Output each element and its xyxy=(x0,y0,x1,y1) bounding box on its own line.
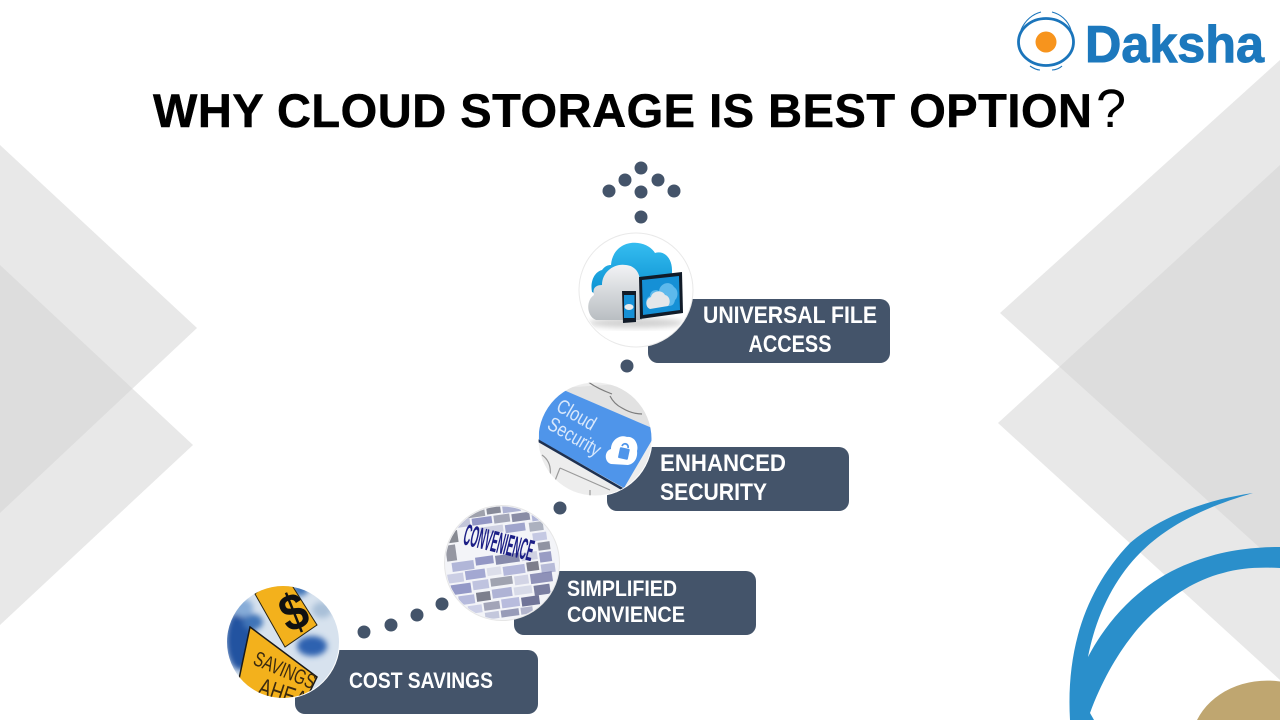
bar text: COST SAVINGS xyxy=(349,668,493,693)
bar text: UNIVERSAL FILE xyxy=(703,302,877,329)
bar text: SIMPLIFIED xyxy=(567,576,677,601)
panel: universal file access xyxy=(579,233,890,363)
icon: cloud security key xyxy=(538,382,652,496)
icon: cloud security key: Cloud xyxy=(552,395,600,435)
bar text: SECURITY xyxy=(660,479,767,506)
panel: simplified convenience xyxy=(438,497,756,635)
label bar xyxy=(514,571,756,635)
title: WHY CLOUD STORAGE IS BEST OPTION xyxy=(153,84,1092,137)
icon: savings ahead sign: $ xyxy=(271,581,317,645)
connector dots: cost savings to convenience xyxy=(358,598,448,638)
panel: simplified convenience: CONVENIENCE xyxy=(460,519,537,568)
panel: cost savings xyxy=(227,586,538,714)
decorative tan circle xyxy=(1197,681,1280,720)
background triangles: right xyxy=(998,60,1280,680)
background triangles: left xyxy=(0,145,197,625)
logo: Daksha xyxy=(1018,12,1265,74)
label bar xyxy=(295,650,538,714)
bar text: CONVIENCE xyxy=(567,602,685,627)
bar text xyxy=(660,450,786,506)
label bar xyxy=(607,447,849,511)
bar text: ACCESS xyxy=(748,331,832,358)
bar text xyxy=(703,302,877,358)
title: ? xyxy=(1096,79,1126,139)
arrow of dots pointing up xyxy=(602,162,680,224)
logo: Daksha: Daksha xyxy=(1085,16,1265,74)
label bar xyxy=(648,299,890,363)
bar text: ENHANCED xyxy=(660,450,786,477)
icon: cloud security key: Security xyxy=(544,413,605,461)
connector dot: convenience to security xyxy=(554,502,566,514)
icon: savings ahead sign: SAVINGS xyxy=(250,647,319,694)
connector dot: security to file access xyxy=(620,360,634,372)
bar text xyxy=(567,576,685,627)
panel: enhanced security xyxy=(530,375,849,511)
decorative blue swoosh xyxy=(1069,493,1280,720)
icon: cloud devices xyxy=(579,233,693,347)
icon: convenience word cloud xyxy=(444,505,560,621)
icon: savings ahead sign xyxy=(227,586,340,698)
